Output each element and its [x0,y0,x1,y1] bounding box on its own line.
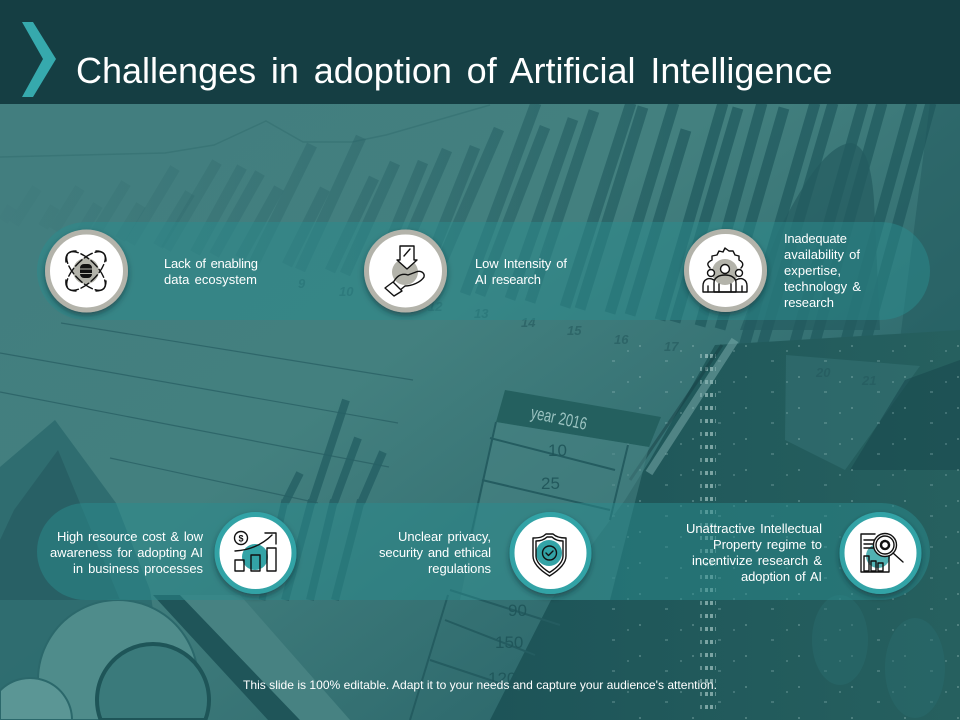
icon: gear and people [703,248,747,292]
item: intellectual property [686,514,919,592]
background: financial photo collage: year 2016 [529,403,589,434]
label: expertise, [784,263,841,278]
background: financial photo collage: 120 [488,669,516,688]
icon: shield with check [533,534,566,576]
background: financial photo collage: 20 [815,365,831,380]
footer note: This slide is 100% editable. Adapt it to your needs and capture your audience's attention. [243,678,717,692]
band: bottom row [37,503,930,600]
label: in business processes [73,561,204,576]
label [50,529,204,576]
label: Unclear privacy, [398,529,491,544]
background: financial photo collage: 17 [664,339,679,354]
background: financial photo collage: 9 [298,276,306,291]
item: data ecosystem [48,232,258,310]
label: Low Intensity of [475,256,567,271]
label [475,256,567,287]
background: financial photo collage: 150 [495,633,523,652]
icon: dollar and rising bars: $ [238,534,244,544]
background: financial photo collage: 13 [474,306,489,321]
item: expertise [686,231,861,310]
background: financial photo collage: 25 [541,474,560,493]
label: availability of [784,247,860,262]
label: awareness for adopting AI [50,545,203,560]
label: security and ethical [379,545,491,560]
label: technology & [784,279,861,294]
item: privacy [379,514,589,592]
background: financial photo collage: 10 [339,284,354,299]
header bar [0,0,960,104]
label: research [784,295,834,310]
background: financial photo collage: 14 [521,315,536,330]
label: Property regime to [713,537,822,552]
label: AI research [475,272,541,287]
label: data ecosystem [164,272,257,287]
icon: hand with percent arrow [385,246,424,296]
label: incentivize research & [692,553,822,568]
label: Inadequate [784,231,847,246]
icon: dollar and rising bars [234,532,276,571]
label [164,256,258,287]
label [686,521,822,584]
background: financial photo collage: 21 [861,373,876,388]
icon: report and magnifier [861,534,903,572]
label [379,529,492,576]
label: Unattractive Intellectual [686,521,822,536]
icon: chevron [22,22,56,97]
background: financial photo collage: 10 [548,441,567,460]
band: top row [37,222,930,320]
label: regulations [428,561,492,576]
label: High resource cost & low [57,529,204,544]
background: financial photo collage: 15 [567,323,582,338]
title: Challenges in adoption of Artificial Intelligence [76,50,832,91]
label: Lack of enabling [164,256,258,271]
label [784,231,861,310]
background: financial photo collage: 90 [508,601,527,620]
label: adoption of AI [741,569,822,584]
background: financial photo collage: 12 [428,299,443,314]
item: low intensity [366,232,567,310]
background: financial photo collage: 16 [614,332,629,347]
item: resource cost [50,514,294,592]
icon: data orbit [61,246,111,296]
